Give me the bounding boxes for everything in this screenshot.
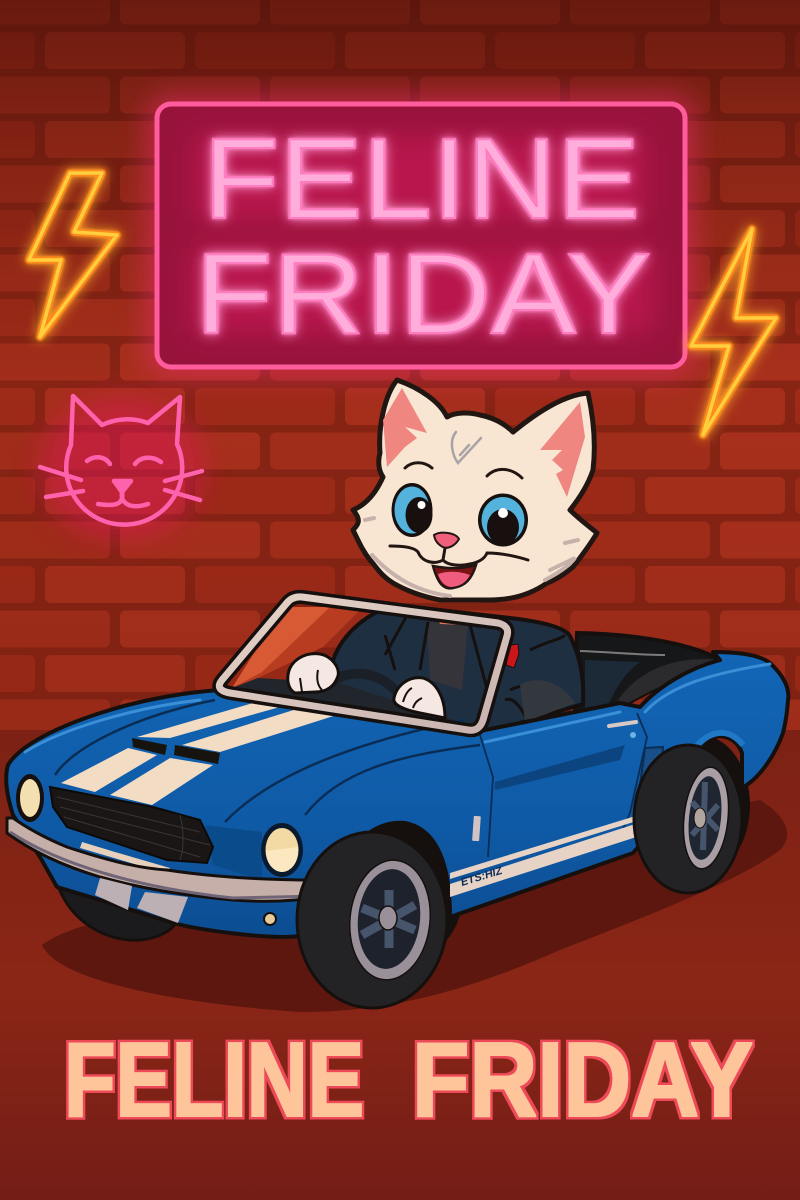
door lock — [630, 732, 636, 738]
hood stripes — [61, 703, 343, 805]
right paw — [394, 678, 445, 718]
rear wheel arch — [650, 735, 750, 875]
neon sign — [147, 94, 695, 377]
spokes — [692, 782, 718, 850]
sign text: FELINE: FELINE — [203, 116, 640, 243]
rim — [679, 765, 733, 871]
far front tyre — [56, 880, 180, 940]
brick wall background — [0, 0, 800, 760]
windshield reflection highlight — [232, 607, 330, 688]
hub — [379, 906, 397, 930]
left paw — [288, 654, 338, 693]
tyre — [634, 745, 742, 893]
icon: right neon lightning bolt — [691, 229, 776, 435]
rim — [344, 856, 436, 984]
icon: neon cat face — [40, 396, 204, 540]
cat jacket — [333, 605, 583, 735]
dashboard — [232, 678, 470, 725]
rear arch highlight — [690, 733, 743, 757]
bumper underside — [10, 832, 320, 898]
neon cat lines — [40, 396, 202, 525]
side badge — [472, 816, 481, 841]
icon: left neon lightning bolt — [29, 173, 117, 337]
front bumper — [7, 818, 333, 901]
cat and car — [6, 380, 788, 1008]
body shell — [6, 652, 788, 937]
right headlight — [261, 823, 303, 877]
floor — [0, 730, 800, 1200]
cat head — [353, 380, 597, 600]
sign glow — [147, 94, 695, 377]
tyre — [297, 832, 447, 1008]
nose recess shading — [205, 825, 262, 880]
jacket shirt — [427, 622, 468, 690]
jacket neck — [436, 614, 470, 625]
whisker smile — [390, 546, 528, 565]
bottom title — [64, 1021, 753, 1139]
left inner ear — [383, 388, 427, 467]
forehead tuft — [452, 432, 481, 463]
hub — [694, 808, 706, 828]
text glow halo — [190, 135, 655, 333]
right inner ear — [540, 402, 585, 497]
tongue — [438, 572, 470, 587]
windshield reflection — [232, 607, 363, 688]
car body — [6, 652, 788, 937]
hood scoops — [132, 738, 220, 764]
side stripes — [450, 806, 668, 897]
sign panel — [157, 104, 685, 367]
convertible top and interior — [575, 633, 720, 715]
door seams — [480, 713, 647, 857]
mouth — [433, 565, 476, 588]
rear wheel — [634, 745, 742, 893]
lower valance stripes — [95, 878, 188, 923]
side vent — [637, 747, 663, 807]
right eye — [478, 494, 528, 546]
spokes — [362, 890, 415, 948]
sign text: FRIDAY: FRIDAY — [195, 231, 651, 358]
steering wheel — [332, 674, 395, 690]
head shape — [353, 380, 597, 600]
body highlights — [25, 664, 770, 752]
nose — [434, 533, 459, 548]
front wheel arch — [307, 821, 463, 969]
door handle — [609, 722, 636, 726]
jacket red emblem — [506, 644, 519, 668]
left eye — [392, 483, 432, 537]
lower grille stripes — [80, 842, 170, 873]
hood creases — [55, 700, 480, 822]
neon cat glow — [40, 396, 204, 540]
jacket folds — [385, 610, 565, 722]
brows — [405, 463, 522, 478]
fog light — [264, 913, 276, 925]
bottom word FELINE: FELINE — [64, 1021, 364, 1139]
side stripe lettering: ETS:HIZ — [459, 865, 505, 889]
car shadow — [42, 800, 787, 1012]
grille — [50, 787, 213, 863]
front wheel — [297, 832, 447, 1008]
left headlight — [16, 774, 44, 822]
door dark band — [495, 745, 625, 790]
windshield frame — [219, 597, 508, 730]
head fur shading — [365, 518, 578, 596]
bottom word FRIDAY: FRIDAY — [412, 1021, 753, 1139]
